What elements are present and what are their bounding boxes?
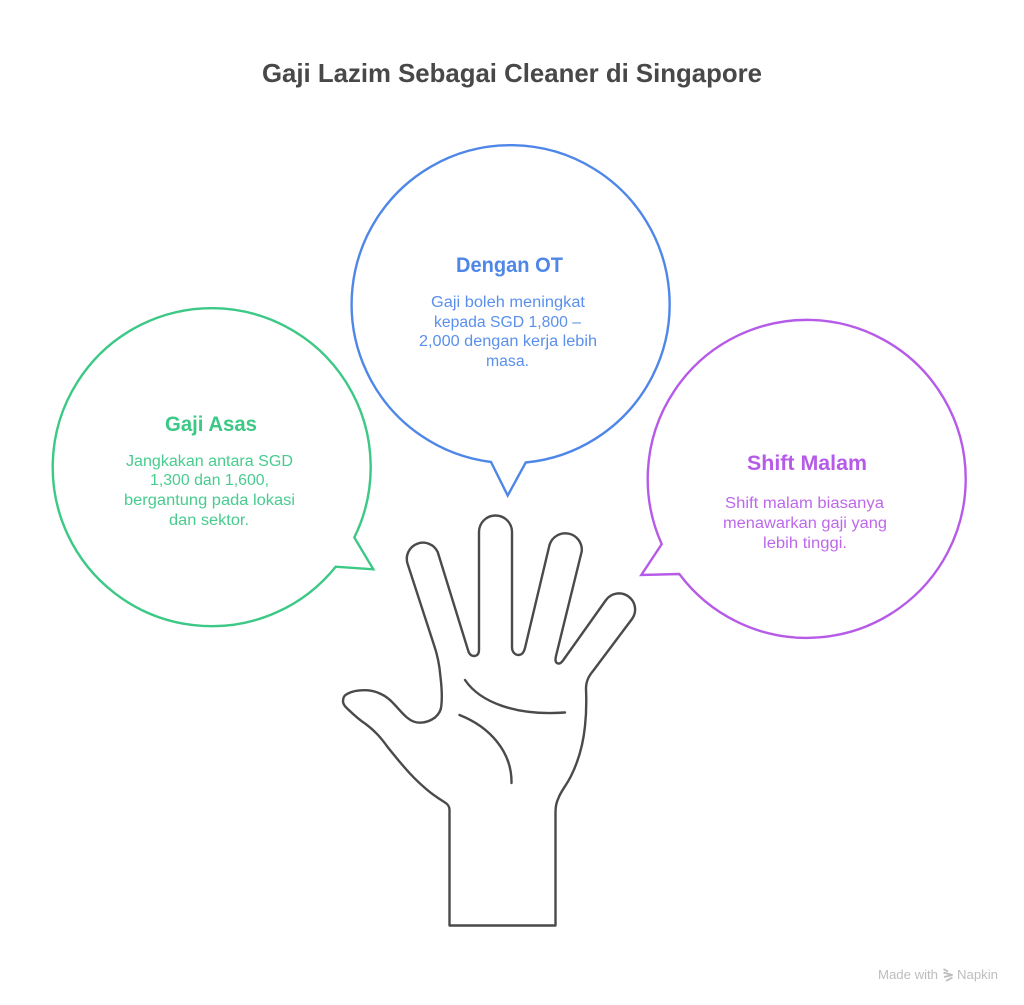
heading: Gaji Asas: Gaji Asas — [165, 413, 257, 436]
text block: Gaji Asas description: Jangkakan antara SGD — [126, 453, 293, 470]
text block: Dengan OT description: masa. — [486, 353, 529, 370]
panel: Gaji Asas speech bubble — [53, 308, 373, 626]
text block: Dengan OT description: 2,000 dengan kerja lebih — [419, 333, 597, 350]
heading: Dengan OT: Dengan OT — [456, 254, 563, 277]
text block: Gaji Asas description: 1,300 dan 1,600, — [150, 472, 269, 489]
footer: Made with Napkin: Napkin — [957, 968, 998, 982]
text block: Shift Malam description — [723, 495, 887, 552]
bubble outline: purple — [641, 320, 966, 638]
footer: Made with Napkin — [878, 968, 998, 982]
text block: Gaji Asas description: dan sektor. — [169, 512, 249, 529]
text block: Dengan OT description — [419, 294, 597, 370]
text block: Gaji Asas description: bergantung pada lokasi — [124, 492, 295, 509]
panel: Dengan OT speech bubble — [352, 145, 670, 495]
text block: Dengan OT description: Gaji boleh meningkat — [431, 294, 586, 311]
panel: Shift Malam speech bubble — [641, 320, 966, 638]
text block: Shift Malam description: Shift malam biasanya — [725, 495, 884, 512]
heading: Shift Malam: Shift Malam — [747, 452, 867, 475]
text block: Shift Malam description: menawarkan gaji yang — [723, 515, 887, 532]
text block: Dengan OT description: kepada SGD 1,800 – — [434, 314, 581, 331]
palm line: upper — [465, 680, 565, 713]
bubble outline: green — [53, 308, 373, 626]
icon: Napkin logo — [944, 969, 952, 981]
icon: open hand outline — [343, 516, 635, 926]
palm line: lower — [460, 715, 512, 783]
text block: Shift Malam description: lebih tinggi. — [763, 535, 847, 552]
footer: Made with Napkin: Made with — [878, 968, 938, 982]
bubble outline: blue — [352, 145, 670, 495]
title: Gaji Lazim Sebagai Cleaner di Singapore — [262, 58, 762, 88]
text block: Gaji Asas description — [124, 453, 295, 529]
